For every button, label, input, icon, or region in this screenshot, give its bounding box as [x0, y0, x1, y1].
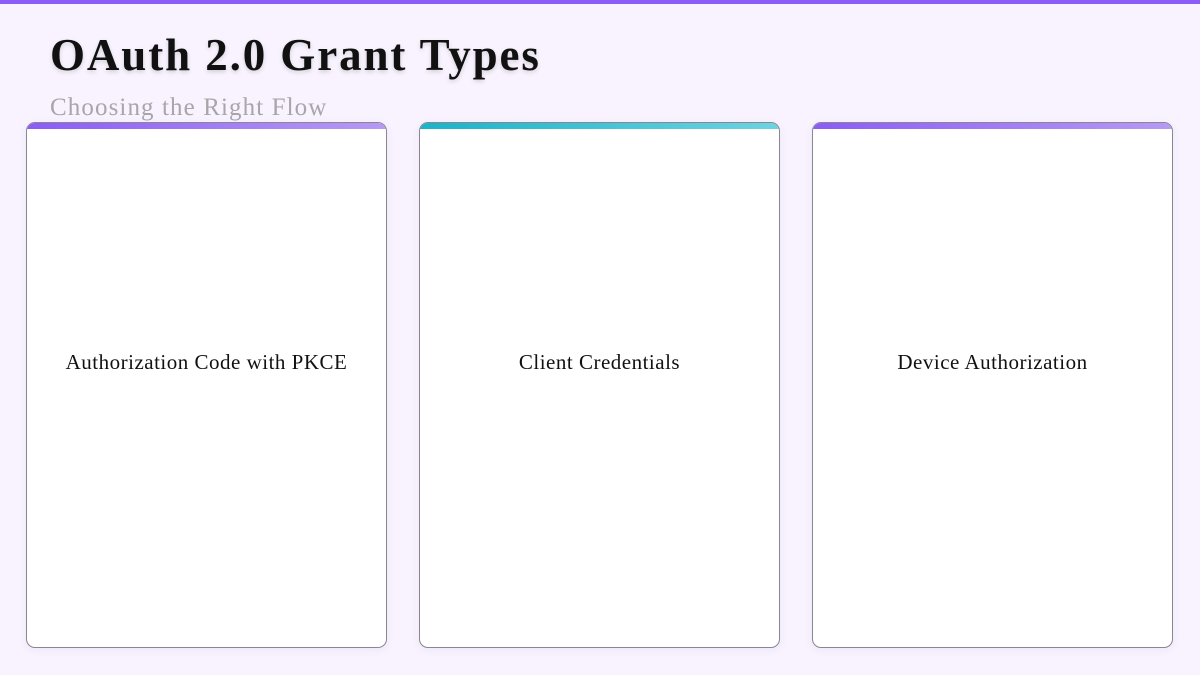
label: device authorization: Device Authorization	[897, 350, 1088, 374]
title: OAuth 2.0 Grant Types	[50, 30, 541, 80]
panel: client credentials	[419, 122, 780, 648]
panel: authorization code with PKCE	[26, 122, 387, 648]
label: authorization code: Authorization Code with PKCE	[66, 350, 347, 374]
label: client credentials: Client Credentials	[519, 350, 680, 374]
panel: device authorization	[812, 122, 1173, 648]
subtitle: Choosing the Right Flow	[50, 94, 327, 121]
